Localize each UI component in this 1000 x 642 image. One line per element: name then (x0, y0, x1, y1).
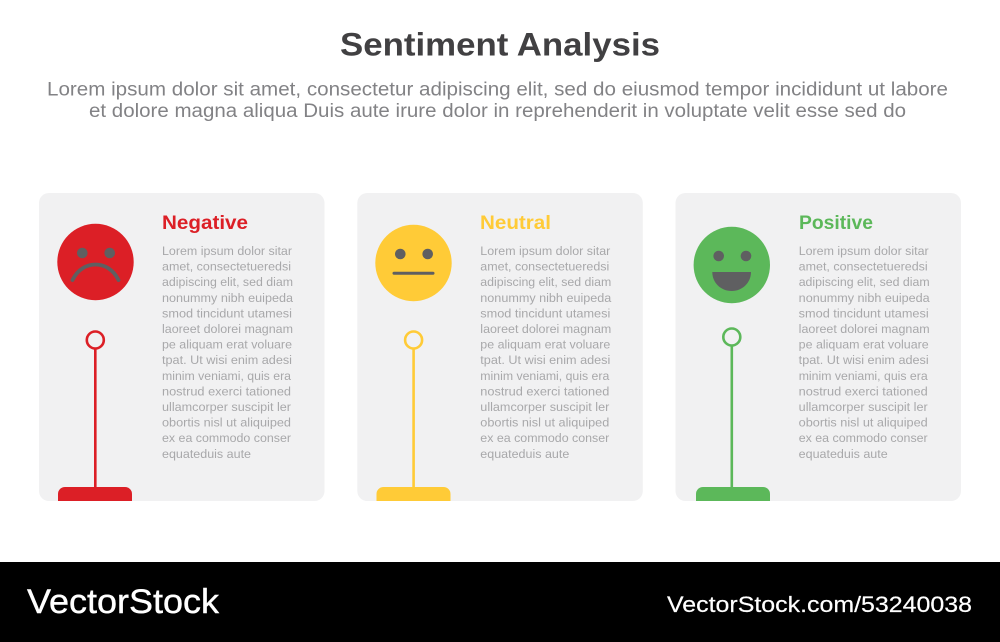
body text: pe aliquam erat voluare (162, 338, 292, 352)
body text: Lorem ipsum dolor sitar (799, 244, 929, 258)
panel: negative (39, 193, 324, 501)
body text: nonummy nibh euipeda (480, 291, 611, 305)
body text: pe aliquam erat voluare (799, 338, 929, 352)
body text: ex ea commodo conser (480, 431, 609, 445)
body text: nostrud exerci tationed (799, 384, 928, 398)
body text: adipiscing elit, sed diam (162, 275, 293, 289)
subtitle text (47, 80, 948, 122)
subtitle text: et dolore magna aliqua Duis aute irure dolor in reprehenderit in voluptate velit esse sed do (89, 101, 906, 122)
body text: smod tincidunt utamesi (480, 306, 610, 320)
body text: laoreet dolorei magnam (480, 322, 611, 336)
body text (162, 244, 293, 461)
title: Sentiment Analysis (340, 26, 660, 62)
heading: negative: Negative (162, 213, 248, 234)
body text (799, 244, 930, 461)
body text: nostrud exerci tationed (480, 384, 609, 398)
body text: laoreet dolorei magnam (799, 322, 930, 336)
body text: ullamcorper suscipit ler (162, 400, 291, 414)
body text: pe aliquam erat voluare (480, 338, 610, 352)
body text: tpat. Ut wisi enim adesi (799, 353, 929, 367)
body text: minim veniami, quis era (162, 369, 291, 383)
icon: neutral face (375, 225, 452, 301)
heading: positive: Positive (799, 213, 873, 234)
footer image id: VectorStock.com/53240038 (667, 592, 972, 617)
panel: neutral (357, 193, 643, 501)
body text: amet, consectetueredsi (799, 260, 928, 274)
body text: obortis nisl ut aliquiped (480, 416, 609, 430)
footer bar (0, 562, 1000, 642)
body text: smod tincidunt utamesi (162, 306, 292, 320)
pin marker (58, 332, 132, 501)
body text: obortis nisl ut aliquiped (799, 416, 928, 430)
body text: minim veniami, quis era (799, 369, 928, 383)
body text: amet, consectetueredsi (480, 260, 609, 274)
body text: tpat. Ut wisi enim adesi (162, 353, 292, 367)
body text: Lorem ipsum dolor sitar (162, 244, 292, 258)
body text: nostrud exerci tationed (162, 384, 291, 398)
body text: equateduis aute (162, 447, 251, 461)
body text: amet, consectetueredsi (162, 260, 291, 274)
body text: minim veniami, quis era (480, 369, 609, 383)
body text: obortis nisl ut aliquiped (162, 416, 291, 430)
body text: equateduis aute (799, 447, 888, 461)
body text: nonummy nibh euipeda (162, 291, 293, 305)
body text: tpat. Ut wisi enim adesi (480, 353, 610, 367)
body text: Lorem ipsum dolor sitar (480, 244, 610, 258)
body text: adipiscing elit, sed diam (480, 275, 611, 289)
body text: ex ea commodo conser (799, 431, 928, 445)
heading: neutral: Neutral (480, 213, 551, 234)
icon: happy face (694, 227, 770, 303)
pin marker (376, 332, 450, 501)
body text: nonummy nibh euipeda (799, 291, 930, 305)
body text: ullamcorper suscipit ler (799, 400, 928, 414)
body text: smod tincidunt utamesi (799, 306, 929, 320)
body text: equateduis aute (480, 447, 569, 461)
body text: ullamcorper suscipit ler (480, 400, 609, 414)
panel: positive (676, 193, 961, 501)
pin marker (696, 328, 770, 501)
body text: laoreet dolorei magnam (162, 322, 293, 336)
subtitle text: Lorem ipsum dolor sit amet, consectetur adipiscing elit, sed do eiusmod tempor incididunt ut labore (47, 80, 948, 100)
body text: adipiscing elit, sed diam (799, 275, 930, 289)
icon: sad face (57, 224, 134, 300)
footer logo: VectorStock (27, 583, 220, 621)
body text (480, 244, 611, 461)
body text: ex ea commodo conser (162, 431, 291, 445)
